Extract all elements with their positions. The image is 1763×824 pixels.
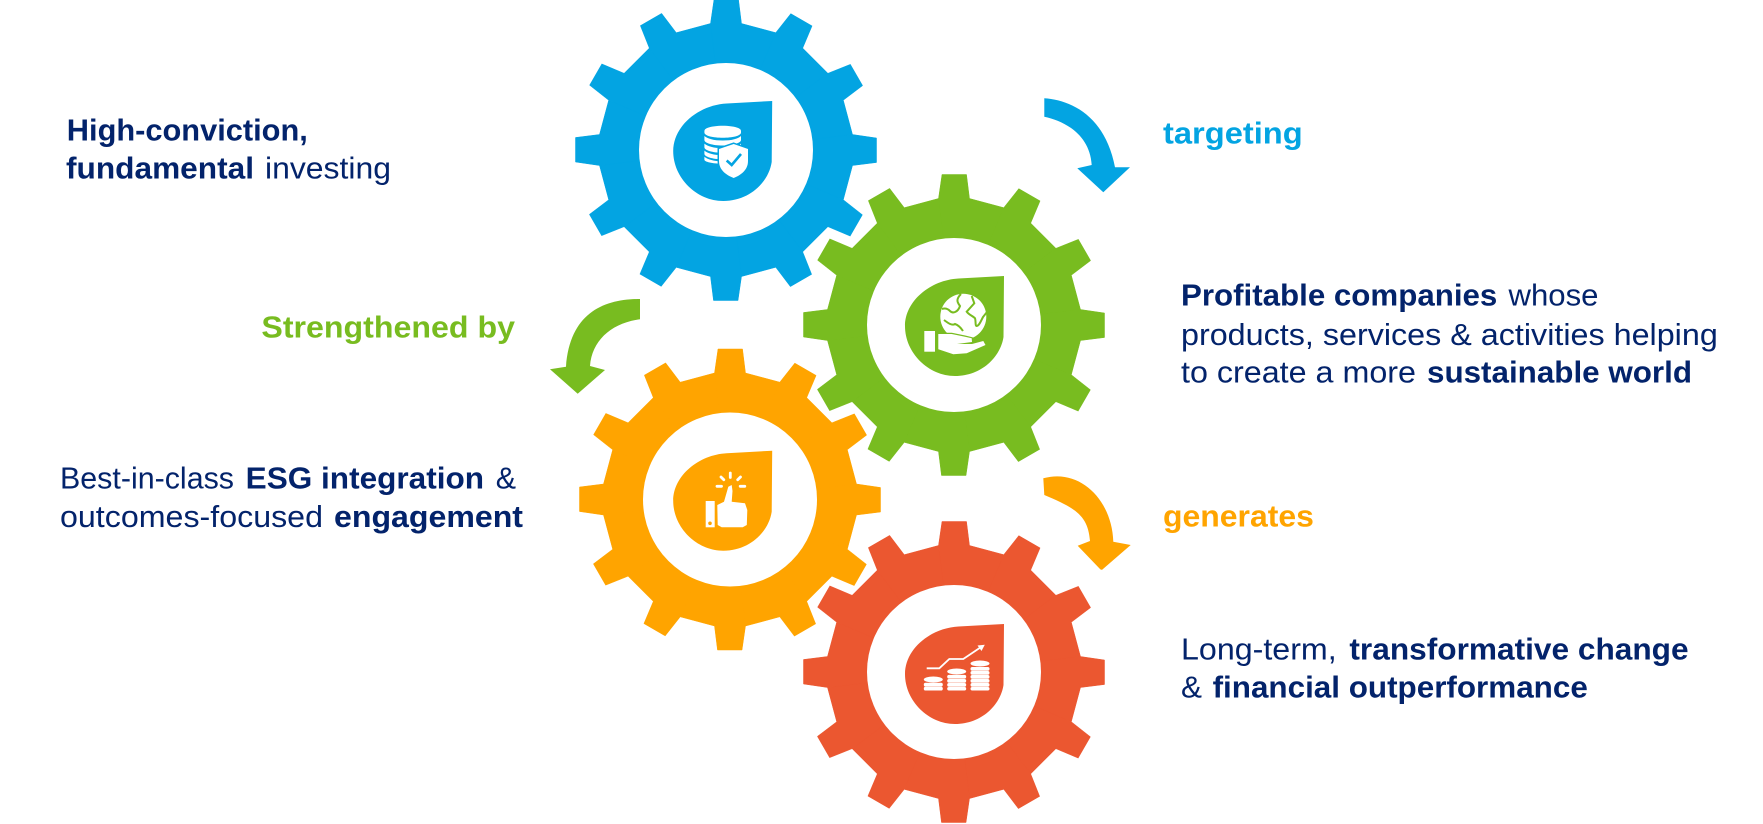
text: high-conviction fundamental investing: fundamental — [66, 150, 254, 185]
text: ESG integration and engagement: & — [496, 460, 516, 495]
text: high-conviction fundamental investing — [66, 113, 391, 185]
text: profitable companies: products, services & activities helping — [1181, 317, 1718, 352]
icon: orange leaf with thumbs up — [673, 451, 772, 551]
text: profitable companies: Profitable companies — [1181, 278, 1497, 313]
text: profitable companies: to create a more — [1181, 355, 1416, 390]
text: profitable companies — [1181, 278, 1718, 390]
text: ESG integration and engagement: ESG integration — [246, 460, 484, 495]
text: ESG integration and engagement: outcomes-focused — [60, 499, 323, 534]
icon: green leaf with globe in hand — [905, 276, 1004, 376]
label: Strengthened by: Strengthened by — [261, 309, 516, 344]
text: long-term transformative change: financial outperformance — [1213, 669, 1588, 704]
text: profitable companies: whose — [1507, 278, 1598, 313]
text: long-term transformative change: transformative change — [1349, 631, 1689, 666]
arrow: blue — [1044, 98, 1130, 192]
text: long-term transformative change: & — [1181, 669, 1202, 704]
icon: blue leaf with coins and shield — [673, 101, 772, 201]
gear: green — [799, 170, 1109, 480]
text: high-conviction fundamental investing: investing — [265, 150, 391, 185]
icon: red leaf with growth chart and coins — [905, 624, 1004, 724]
gear: blue — [571, 0, 881, 305]
text: long-term transformative change — [1181, 631, 1689, 704]
text: ESG integration and engagement: engagement — [334, 499, 523, 534]
arrow: green — [550, 299, 640, 394]
text: high-conviction fundamental investing: High-conviction, — [67, 113, 308, 148]
label: generates: generates — [1163, 499, 1314, 534]
text: profitable companies: sustainable world — [1427, 355, 1692, 390]
arrow: orange — [1043, 476, 1131, 570]
text: ESG integration and engagement — [60, 460, 523, 534]
gear: orange — [575, 344, 885, 655]
text: ESG integration and engagement: Best-in-class — [60, 460, 234, 495]
gear: red — [799, 517, 1109, 824]
label: targeting: targeting — [1163, 115, 1303, 150]
text: long-term transformative change: Long-term, — [1181, 631, 1337, 666]
